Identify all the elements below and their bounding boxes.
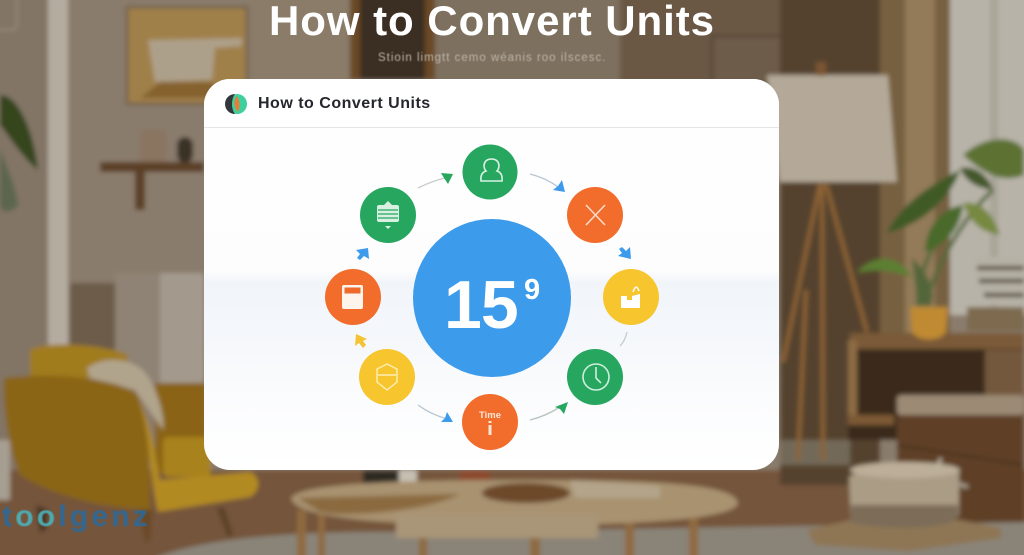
center circle: 15 degrees bbox=[413, 219, 571, 377]
node: time info bbox=[462, 394, 518, 450]
arrow: unlock to clock bbox=[620, 332, 627, 346]
arrow: time to shield bbox=[418, 405, 453, 422]
node: shield bbox=[359, 349, 415, 405]
striped vase bbox=[977, 257, 1024, 305]
floor bbox=[0, 470, 1024, 555]
side cabinet bbox=[848, 340, 1024, 440]
arrow: close to unlock bbox=[618, 247, 631, 259]
arrow: device to list bbox=[356, 248, 369, 260]
arrow: clock to time bbox=[530, 402, 568, 420]
card header bbox=[204, 79, 779, 128]
lamp bbox=[767, 75, 897, 182]
wall panel behind chair bbox=[70, 283, 115, 353]
node: clock bbox=[567, 349, 623, 405]
arrow: list to person bbox=[418, 173, 453, 188]
node: time info: Time bbox=[479, 410, 501, 421]
icon: header logo bbox=[225, 94, 247, 114]
table bbox=[363, 470, 399, 500]
translucent table label bbox=[396, 513, 598, 538]
left plant bbox=[0, 148, 18, 211]
node: device bbox=[325, 269, 381, 325]
arrow: shield to device bbox=[355, 334, 367, 348]
bench bbox=[897, 410, 1024, 528]
node: close bbox=[567, 187, 623, 243]
panel: main white card bbox=[204, 79, 779, 470]
node: unlock bbox=[603, 269, 659, 325]
shelf bbox=[100, 162, 204, 172]
arrow: person to close bbox=[530, 174, 565, 192]
armchair bbox=[155, 383, 207, 473]
node: list bbox=[360, 187, 416, 243]
card heading: How to Convert Units bbox=[258, 95, 431, 112]
picture frame bbox=[127, 7, 247, 104]
center circle: 15 degrees: 15 bbox=[444, 267, 518, 343]
stool bbox=[807, 520, 1001, 551]
node: person bbox=[462, 144, 518, 200]
rug bbox=[150, 522, 1024, 555]
frame mark at top left bbox=[0, 0, 17, 30]
arrows between nodes bbox=[355, 173, 631, 422]
watermark logo: toolgenz bbox=[2, 500, 151, 533]
plant bbox=[918, 190, 993, 305]
subtitle: Stioin limgtt cemo wéanis roo ilscesc. bbox=[378, 52, 606, 64]
center circle: 15 degrees: 9 bbox=[524, 274, 540, 306]
right wall and curtains bbox=[780, 0, 880, 485]
